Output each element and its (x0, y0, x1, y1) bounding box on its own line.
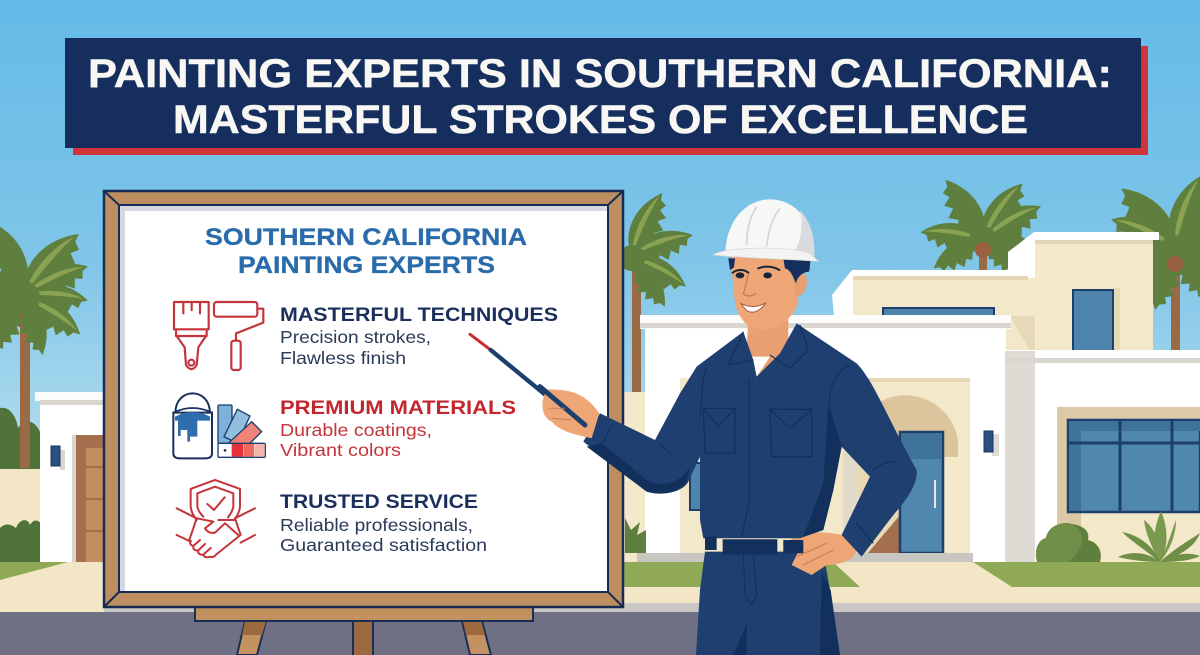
frame (104, 191, 623, 607)
jacket seams (603, 325, 895, 543)
front block (624, 315, 1011, 564)
left window (690, 463, 710, 510)
item: trusted service: TRUSTED SERVICE (280, 491, 478, 513)
undershirt (748, 357, 770, 377)
hand on hip (790, 532, 857, 575)
uniform jacket (583, 323, 917, 557)
small house left (35, 392, 104, 562)
large window (1068, 420, 1200, 512)
icon: paint can and swatches (173, 393, 265, 458)
icon: shield and handshake (177, 480, 255, 557)
neck (747, 317, 788, 377)
smile (741, 303, 766, 312)
item: trusted service: Guaranteed satisfaction (280, 535, 487, 555)
plant by wall (625, 518, 646, 553)
item: masterful techniques: Flawless finish (280, 348, 406, 368)
item: masterful techniques: Precision strokes, (280, 327, 431, 347)
palm tree left (0, 219, 95, 468)
palm tree behind house (919, 172, 1049, 283)
easel (195, 604, 533, 655)
main house (624, 232, 1200, 564)
item: masterful techniques: MASTERFUL TECHNIQUES (280, 304, 558, 326)
painting board (104, 191, 623, 607)
lawn center (624, 562, 860, 587)
eyes and brows (733, 267, 779, 273)
head (728, 257, 811, 330)
left garden and wall (0, 408, 42, 564)
easel legs (237, 621, 491, 655)
ground (0, 562, 1200, 655)
wall sconce (984, 431, 999, 456)
upper tower (1008, 232, 1159, 352)
painter figure (470, 199, 917, 655)
shrub (1036, 523, 1101, 562)
belt (705, 537, 803, 555)
item: premium materials: Durable coatings, (280, 420, 432, 440)
item: trusted service: Reliable professionals, (280, 515, 473, 535)
title text: PAINTING EXPERTS IN SOUTHERN CALIFORNIA: (88, 52, 1112, 96)
board heading: PAINTING EXPERTS (238, 252, 495, 279)
middle section (832, 270, 1035, 352)
palm tree right (1104, 170, 1200, 352)
banner shadow (73, 46, 1148, 155)
title banner (65, 38, 1148, 155)
fingers (797, 543, 833, 565)
title text (88, 52, 1112, 142)
banner panel (65, 38, 1141, 148)
trousers (696, 552, 840, 655)
pointer stick (470, 334, 583, 426)
board heading (205, 224, 527, 279)
item: trusted service (280, 491, 487, 555)
item: premium materials (280, 397, 516, 460)
item: masterful techniques (280, 304, 558, 368)
item: premium materials: Vibrant colors (280, 440, 401, 460)
board heading: SOUTHERN CALIFORNIA (205, 224, 527, 251)
hair (728, 258, 811, 283)
white panel (119, 205, 608, 592)
icon: brush and roller (174, 302, 263, 370)
title text: MASTERFUL STROKES OF EXCELLENCE (173, 98, 1028, 142)
right wing (1005, 350, 1200, 563)
hard hat (713, 199, 819, 261)
lawn right (973, 562, 1200, 587)
entry recess (680, 378, 970, 554)
sky (0, 0, 1200, 470)
front door (900, 432, 943, 553)
pointing hand (540, 387, 599, 438)
agave plant (1118, 511, 1200, 562)
palm tree behind board (619, 187, 698, 392)
easel ledge (195, 604, 533, 621)
item: premium materials: PREMIUM MATERIALS (280, 397, 516, 419)
nose (743, 275, 756, 296)
lawn left (0, 562, 68, 580)
